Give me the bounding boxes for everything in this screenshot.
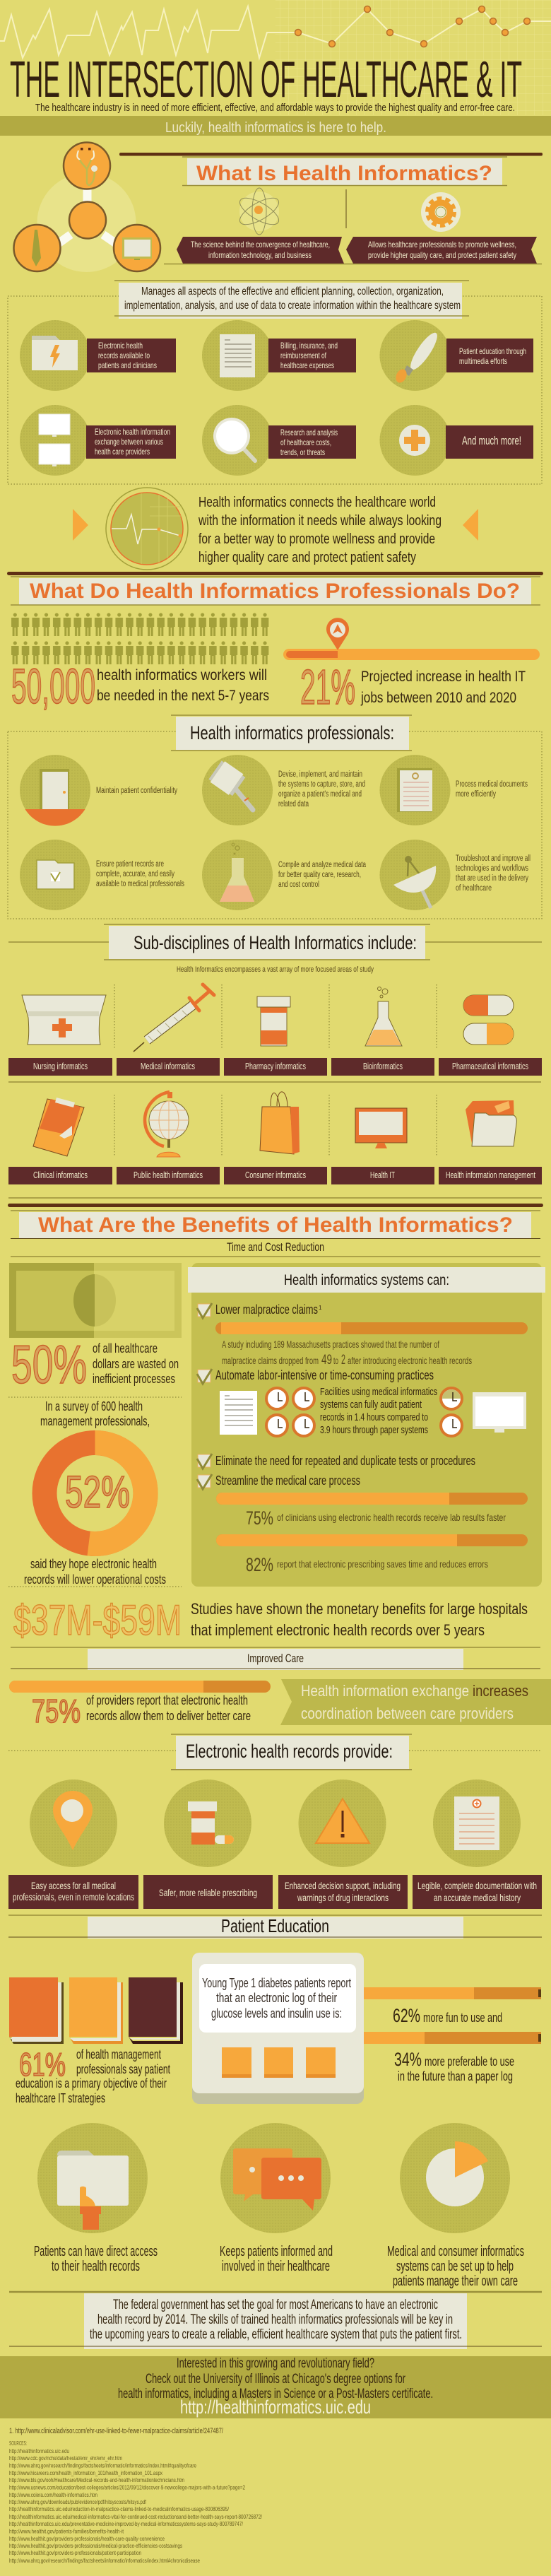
- item: devise systems: related data: [278, 800, 309, 808]
- item: nursing informatics: [8, 995, 112, 1076]
- banner: call to action: Check out the University of Illinois at Chicago's degree options for: [146, 2372, 405, 2387]
- chart: donut 52 percent: [45, 1430, 158, 1556]
- item: process documents: [380, 755, 528, 825]
- text: sources: http://healthinformatics.uic.edu: [9, 2447, 69, 2454]
- item: billing: [202, 320, 356, 391]
- item: lower malpractice claims: 2: [341, 1353, 345, 1368]
- heading: health informatics professionals: Health informatics professionals:: [190, 722, 394, 743]
- item: compile data: for better quality care, research,: [278, 871, 361, 879]
- text: sources: [9, 2440, 262, 2564]
- item: medical informatics: [117, 984, 220, 1076]
- arrow: right: [463, 509, 478, 541]
- chart: 21 percent slider: [283, 618, 540, 660]
- item: information exchange: health care providers: [95, 447, 150, 457]
- heading: sub-disciplines: [8, 924, 542, 960]
- item: electronic health records: patients and clinicians: [98, 360, 157, 370]
- stat: 21 percent jobs: 21%: [300, 659, 355, 714]
- item: electronic health records: records available to: [98, 351, 150, 360]
- callout: manages all aspects: Manages all aspects of the effective and efficient planning, collection, organization,: [141, 286, 444, 298]
- stat: 61 percent: [16, 2046, 170, 2105]
- icon: gear: [421, 192, 461, 232]
- stat: 34 percent more preferable: more preferable to use: [425, 2054, 514, 2069]
- item: clinical informatics: Clinical informatics: [33, 1170, 88, 1180]
- item: ensure records: complete, accurate, and easily: [96, 870, 174, 878]
- stat: 61 percent: 61%: [19, 2046, 66, 2083]
- item: lower malpractice claims: malpractice claims dropped from: [222, 1355, 319, 1366]
- item: clinical informatics: [8, 1098, 112, 1184]
- item: informed patients: [220, 2123, 333, 2274]
- item: pharmacy informatics: [224, 996, 327, 1076]
- stat: 61 percent: education is a primary objective of their: [16, 2076, 167, 2090]
- item: process documents: more efficiently: [456, 790, 496, 799]
- text: sources: http://www.healthit.gov/providers-professionals/medical-practice-efficiencies-costsavings: [9, 2542, 182, 2549]
- item: electronic health records: [20, 320, 176, 391]
- item: easy access: professionals, even in remote locations: [13, 1891, 134, 1902]
- item: billing: Billing, insurance, and: [280, 341, 338, 351]
- panel: diabetes device: glucose levels and insulin use is:: [211, 2006, 342, 2021]
- item: ensure records: Ensure patient records are: [96, 860, 164, 869]
- item: research and analysis: [202, 405, 356, 476]
- text: said they hope: records will lower operational costs: [24, 1572, 166, 1587]
- text: health informatics connects: higher quality care and protect patient safety: [199, 549, 417, 565]
- item: informed patients: involved in their healthcare: [222, 2259, 330, 2274]
- text: facilities audit: systems can fully audit patient: [320, 1399, 422, 1411]
- ribbon: health information exchange: increases: [473, 1682, 528, 1700]
- text: survey of 600: In a survey of 600 health: [45, 1399, 143, 1413]
- panel: electronic health record benefits: [8, 1780, 542, 1909]
- item: lower malpractice claims: A study including 189 Massachusetts practices showed that the number of: [222, 1339, 439, 1350]
- stat: 50 percent wasted: dollars are wasted on: [93, 1357, 179, 1371]
- icon: atom: [236, 188, 283, 235]
- stat: 61 percent: healthcare IT strategies: [16, 2091, 105, 2105]
- chart: donut 52 percent: 52%: [65, 1466, 130, 1517]
- banner: luckily: Luckily, health informatics is here to help.: [165, 120, 386, 136]
- item: easy access: Easy access for all medical: [31, 1880, 116, 1891]
- ribbon: the science: information technology, and business: [208, 250, 312, 260]
- panel: sub-discipline row one: [8, 984, 542, 1076]
- stat: 50 percent wasted: of all healthcare: [93, 1341, 158, 1355]
- text: health informatics connects: [198, 494, 442, 565]
- item: devise systems: [202, 755, 365, 825]
- item: bioinformatics: Bioinformatics: [363, 1061, 403, 1071]
- item: research and analysis: of healthcare costs,: [280, 437, 331, 447]
- stat: 50,000 workers: be needed in the next 5-7 years: [97, 688, 269, 704]
- ribbon: health information exchange: Health information exchange: [301, 1682, 469, 1700]
- text: sources: http://www.cdc.gov/nchs/data/hestat/emr_ehr/emr_ehr.htm: [9, 2454, 122, 2462]
- item: research and analysis: Research and analysis: [280, 428, 338, 437]
- stat: 21 percent jobs: jobs between 2010 and 2020: [360, 690, 516, 706]
- item: billing: reimbursement of: [280, 351, 326, 360]
- icon: connected healthcare, business and technology circles: [14, 143, 160, 272]
- icon: books: [9, 1977, 183, 2044]
- stat: 75 percent of providers: [9, 1681, 271, 1729]
- item: information exchange: exchange between various: [95, 437, 163, 447]
- item: devise systems: organize a patient's medical and: [278, 790, 362, 799]
- ribbon: health information exchange: coordination between care providers: [301, 1705, 514, 1722]
- text: sources: http://www.ahrq.gov/downloads/pub/evidence/pdf/hitsyscosts/hitsys.pdf: [9, 2498, 146, 2505]
- icon: monitor: [122, 237, 152, 260]
- item: research and analysis: trends, or threats: [280, 447, 325, 457]
- text: sources: http://www.healthit.gov/providers-professionals/patient-participation: [9, 2549, 141, 2556]
- icon: tie: [32, 230, 41, 266]
- text: sources: http://healthinformatics.uic.edu/reduction-in-malpractice-claims-linked-to-medicalinformatics-usage-800806395/: [9, 2505, 229, 2512]
- item: troubleshoot technologies: of healthcare: [456, 884, 492, 893]
- stat: 50,000 workers: [11, 659, 269, 714]
- item: public health informatics: Public health informatics: [134, 1170, 203, 1180]
- item: pharmacy informatics: Pharmacy informatics: [245, 1061, 306, 1071]
- heading: what do professionals do: [7, 572, 543, 605]
- stat: 75 percent of providers: of providers report that electronic health: [86, 1693, 248, 1707]
- panel: sub-discipline row two: [8, 1092, 542, 1184]
- icon: stethoscope: [77, 148, 97, 185]
- icon: dollar bill: [9, 1263, 182, 1338]
- text: survey of 600: [40, 1399, 150, 1428]
- heading: systems can: Health informatics systems can:: [284, 1272, 449, 1288]
- device buttons: [222, 2047, 336, 2078]
- item: health IT: [331, 1108, 434, 1184]
- icon: monitor dial: [106, 488, 188, 570]
- stat: 34 percent more preferable: 34%: [394, 2049, 422, 2070]
- stat: 50 percent wasted: inefficient processes: [93, 1372, 175, 1386]
- text: sources: http://www.bls.gov/ooh/Healthcare/Medical-records-and-health-informationtechnicians.htm: [9, 2476, 184, 2483]
- stat: 75 percent of providers: records allow them to deliver better care: [86, 1709, 251, 1723]
- item: lower malpractice claims: 49: [321, 1353, 332, 1368]
- panel: what health informatics manages: [8, 281, 542, 484]
- item: streamline care: [197, 1474, 360, 1489]
- heading: sub-disciplines: Sub-disciplines of Health Informatics include:: [134, 932, 417, 953]
- item: pharmaceutical informatics: [439, 995, 542, 1076]
- chart: 82 percent bar: report that electronic prescribing saves time and reduces errors: [277, 1558, 488, 1570]
- stat: 50,000 workers: 50,000: [11, 659, 95, 714]
- item: manage own care: [387, 2123, 524, 2289]
- text: health informatics connects: for a better way to promote wellness and provide: [199, 531, 435, 547]
- item: direct access: Patients can have direct access: [34, 2244, 158, 2259]
- item: legible documentation: [413, 1780, 542, 1909]
- ribbon: the science: The science behind the convergence of healthcare,: [191, 240, 330, 249]
- chart: 75 percent bar: 75%: [246, 1507, 273, 1529]
- icons: paper clocks: [266, 1388, 314, 1436]
- stat: monetary benefits: that implement electronic health records over 5 years: [191, 1621, 485, 1639]
- item: information exchange: Electronic health information: [95, 427, 170, 437]
- item: direct access: [34, 2123, 158, 2274]
- item: electronic health records: Electronic health: [98, 341, 143, 351]
- item: troubleshoot technologies: [380, 840, 531, 910]
- ribbon: the science: [177, 237, 344, 264]
- footnote: 1. http://www.clinicaladvisor.com/ehr-use-linked-to-fewer-malpractice-claims/article/247487/: [9, 2427, 224, 2435]
- item: lower malpractice claims: after introducing electronic health records: [348, 1355, 472, 1366]
- item: automate practices: [197, 1368, 526, 1436]
- item: informed patients: Keeps patients informed and: [220, 2244, 333, 2259]
- text: survey of 600: management professionals,: [40, 1414, 150, 1428]
- item: public health informatics: [117, 1092, 220, 1184]
- item: compile data: [202, 840, 366, 910]
- callout: federal government goal: [9, 2292, 542, 2349]
- text: sources: http://www.healthit.gov/patients-families/benefits-health-it: [9, 2527, 124, 2534]
- item: lower malpractice claims: Lower malpractice claims: [215, 1302, 318, 1317]
- item: lower malpractice claims: to: [333, 1355, 338, 1366]
- item: devise systems: Devise, implement, and maintain: [278, 770, 362, 779]
- item: ensure records: available to medical professionals: [96, 880, 184, 888]
- chart: 82 percent bar: 82%: [246, 1554, 273, 1575]
- item: information exchange: [20, 405, 176, 476]
- heading: what is health informatics: [119, 153, 543, 185]
- chart: rows of people: [10, 613, 270, 664]
- stat: 34 percent more preferable: [364, 2032, 541, 2083]
- stat: 50 percent wasted: 50%: [11, 1335, 87, 1395]
- text: sources: http://www.ahrq.gov/research/findings/factsheets/informatic/informatics/index.html#qualityofcare: [9, 2462, 196, 2469]
- item: billing: healthcare expenses: [280, 360, 334, 370]
- text: sources: http://www.ahrq.gov/research/findings/factsheets/informatic/informatics/index.html#chronicdisease: [9, 2557, 200, 2564]
- text: facilities audit: [320, 1386, 437, 1436]
- item: medical informatics: Medical informatics: [141, 1061, 195, 1071]
- panel: diabetes device: that an electronic log of their: [216, 1991, 337, 2005]
- item: consumer informatics: Consumer informatics: [245, 1170, 306, 1180]
- arrow: left: [73, 509, 88, 541]
- item: ensure records: [20, 840, 184, 910]
- stat: 21 percent jobs: [300, 659, 526, 714]
- stat: 62 percent more fun: 62%: [393, 2005, 420, 2026]
- subheading: patient education: [8, 1915, 542, 1939]
- item: health IT: Health IT: [370, 1170, 395, 1180]
- banner: call to action: [0, 2356, 551, 2418]
- item: compile data: Compile and analyze medical data: [278, 861, 366, 869]
- stat: 61 percent: of health management: [76, 2047, 161, 2062]
- stat: 62 percent more fun: more fun to use and: [423, 2011, 502, 2025]
- subheading: improved care: [11, 1647, 540, 1670]
- heading: what is health informatics: What Is Health Informatics?: [196, 162, 492, 185]
- text: said they hope: said they hope electronic health: [30, 1557, 157, 1571]
- item: bioinformatics: [331, 987, 434, 1076]
- panel: diabetes device: [192, 1953, 364, 2104]
- item: nursing informatics: Nursing informatics: [33, 1061, 88, 1071]
- text: sources: http://healthinformatics.uic.edu/medical-informatics-vital-for-continued-cost-reductionsand-better-health-says-report-800726872/: [9, 2513, 262, 2520]
- item: decision support: warnings of drug interactions: [297, 1892, 389, 1903]
- stat: 61 percent: professionals say patient: [76, 2062, 170, 2076]
- stat: monetary benefits: [13, 1596, 528, 1644]
- item: safer prescribing: [143, 1780, 273, 1909]
- heading: what do professionals do: What Do Health Informatics Professionals Do?: [30, 580, 520, 603]
- chart: 75 percent bar: [216, 1493, 528, 1529]
- stat: 50,000 workers: health informatics workers will: [97, 667, 267, 683]
- text: health informatics connects: Health informatics connects the healthcare world: [199, 494, 436, 510]
- subheading: patient education: Patient Education: [221, 1915, 329, 1936]
- stat: 75 percent of providers: 75%: [32, 1693, 81, 1729]
- item: confidentiality: [20, 755, 177, 826]
- item: consumer informatics: [224, 1092, 327, 1184]
- item: confidentiality: Maintain patient confidentiality: [96, 787, 177, 795]
- panel: health informatics professionals: [8, 715, 542, 919]
- text: sources: http://www.healthit.gov/providers-professionals/health-care-quality-convenience: [9, 2535, 165, 2542]
- text: sources: http://www.usnews.com/education/best-colleges/articles/2012/09/12/discover-9-newcollege-majors-with-a-future?page=2: [9, 2483, 245, 2490]
- item: easy access: [8, 1780, 138, 1909]
- heading: health informatics professionals: [171, 715, 412, 751]
- item: lower malpractice claims: 1: [319, 1305, 322, 1311]
- banner: luckily: [0, 116, 551, 136]
- text: sources: http://www.hicareers.com/health_information_101/health_information_101.aspx: [9, 2469, 163, 2476]
- item: decision support: [278, 1780, 408, 1909]
- item: patient education: multimedia efforts: [459, 356, 507, 366]
- item: patient education: [380, 320, 533, 391]
- item: compile data: and cost control: [278, 881, 319, 889]
- chart: heartbeat and trend line: [0, 6, 551, 58]
- text: said they hope: [24, 1557, 166, 1587]
- item: legible documentation: an accurate medical history: [434, 1892, 521, 1903]
- heading: benefits of health informatics: [8, 1198, 543, 1239]
- item: and much more: [380, 405, 533, 476]
- item: streamline care: Streamline the medical care process: [215, 1474, 360, 1488]
- heading: systems can: [188, 1267, 545, 1293]
- chart: 82 percent bar: [216, 1534, 528, 1575]
- item: automate practices: Automate labor-intensive or time-consuming practices: [215, 1368, 434, 1382]
- item: health information management: [439, 1100, 542, 1184]
- callout: manages all aspects: [114, 281, 469, 319]
- ribbon: allows professionals: [346, 237, 537, 264]
- heading: benefits of health informatics: What Are the Benefits of Health Informatics?: [38, 1213, 513, 1237]
- icon: monitor: [473, 1392, 526, 1433]
- text: sources: http://healthinformatics.uic.edu/preventative-medicine-improved-by-medical-informaticssystems-says-study-800789747/: [9, 2520, 243, 2527]
- item: safer prescribing: Safer, more reliable prescribing: [159, 1887, 257, 1898]
- subheading: improved care: Improved Care: [247, 1652, 304, 1665]
- banner: call to action: http://healthinformatics.uic.edu: [180, 2396, 371, 2418]
- text: facilities audit: Facilities using medical informatics: [320, 1386, 437, 1398]
- subtitle: vast array: Health Informatics encompasses a vast array of more focused areas of study: [177, 965, 374, 974]
- text: sources: SOURCES:: [9, 2440, 27, 2447]
- stat: monetary benefits: $37M-$59M: [13, 1596, 182, 1644]
- icons: electronic clocks: [441, 1388, 462, 1436]
- ribbon: health information exchange: [280, 1679, 551, 1725]
- heading: electronic health records provide: [8, 1734, 542, 1770]
- banner: call to action: Interested in this growing and revolutionary field?: [177, 2356, 374, 2371]
- item: and much more: And much more!: [462, 434, 521, 447]
- panel: health informatics systems can: [188, 1263, 545, 1587]
- item: lower malpractice claims: [197, 1302, 528, 1368]
- heading: electronic health records provide: Electronic health records provide:: [186, 1741, 393, 1762]
- panel: diabetes device: Young Type 1 diabetes patients report: [202, 1976, 351, 1990]
- stat: 62 percent more fun: [364, 1987, 541, 2026]
- item: devise systems: the systems to capture, store, and: [278, 780, 365, 789]
- text: health informatics connects: with the information it needs while always looking: [198, 512, 442, 529]
- subheading: time and cost reduction: Time and Cost Reduction: [227, 1240, 324, 1254]
- text: facilities audit: records in 1.4 hours compared to: [320, 1411, 428, 1423]
- item: direct access: to their health records: [52, 2259, 140, 2274]
- text: facilities audit: 3.9 hours through paper systems: [320, 1424, 428, 1436]
- item: decision support: Enhanced decision support, including: [285, 1880, 401, 1891]
- text: sources: http://www.coiera.com/health-informatics.htm: [9, 2491, 97, 2498]
- icon: paper document: [220, 1391, 257, 1435]
- stat: 50 percent wasted: [11, 1335, 179, 1395]
